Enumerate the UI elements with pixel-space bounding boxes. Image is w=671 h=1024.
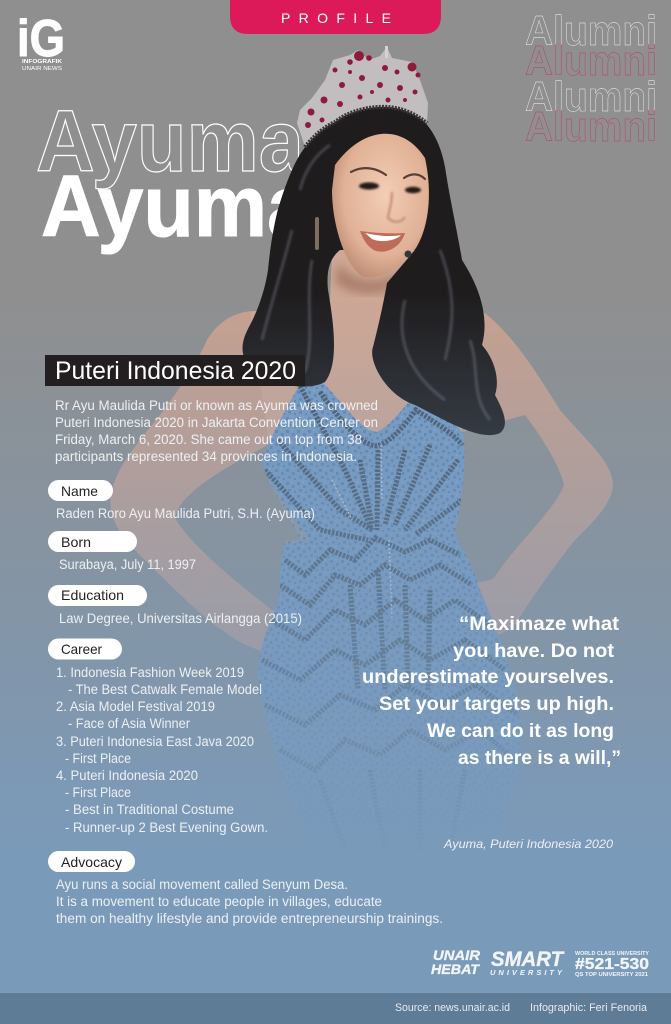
earrings: [315, 217, 412, 258]
QS world class ranking: #521-530: [575, 956, 649, 973]
right arm: [433, 308, 613, 642]
stacked Alumni wordmark: Alumni: [525, 75, 657, 120]
smiling mouth: [360, 231, 405, 252]
gown speckle: [259, 385, 520, 720]
pull quote: We can do it as long: [427, 720, 614, 742]
label: Education: [48, 585, 147, 606]
pull quote: as there is a will,”: [458, 747, 621, 769]
panel: profile details: [45, 355, 443, 926]
footer band: [0, 993, 671, 1024]
career list: - Best in Traditional Costume: [65, 802, 234, 817]
value: education: Law Degree, Universitas Airlangga (2015): [59, 611, 302, 626]
photo: woman wearing crown and blue gown: [110, 46, 613, 870]
stacked Alumni wordmark: Alumni: [525, 39, 657, 84]
pull quote: underestimate yourselves.: [362, 666, 614, 688]
crown gems: [305, 51, 420, 128]
logo: Unair Hebat: [431, 947, 481, 977]
label: Career: [48, 638, 122, 660]
career list: [56, 665, 268, 835]
logo: iG Infografik Unair News: iG: [17, 10, 65, 68]
label: Name: Name: [61, 483, 98, 499]
hair highlights: [262, 145, 490, 420]
nose: [388, 192, 405, 222]
eyebrows: [351, 168, 425, 179]
pull quote: Set your targets up high.: [379, 693, 614, 715]
advocacy paragraph: them on healthy lifestyle and provide entrepreneurship trainings.: [56, 911, 443, 926]
intro paragraph: participants represented 34 provinces in Indonesia.: [55, 449, 357, 464]
label: Advocacy: Advocacy: [61, 854, 122, 870]
tab: profile: [230, 0, 441, 34]
advocacy paragraph: [56, 877, 443, 926]
label: Born: Born: [61, 534, 91, 550]
left arm: [110, 311, 338, 660]
face: [332, 134, 429, 277]
label: Born: [48, 531, 137, 552]
career list: 3. Puteri Indonesia East Java 2020: [56, 734, 254, 749]
stacked Alumni wordmark: [525, 9, 657, 150]
pull quote: you have. Do not: [453, 640, 615, 662]
gown mesh panel: [270, 482, 310, 545]
label: Career: Career: [61, 641, 102, 657]
logo: iG Infografik Unair News: UNAIR NEWS: [22, 66, 62, 72]
career list: - The Best Catwalk Female Model: [68, 682, 262, 697]
logo: Smart University: SMART: [491, 948, 565, 971]
tab: profile: PROFILE: [281, 10, 391, 26]
logo: iG Infografik Unair News: INFOGRAFIK: [22, 59, 62, 65]
career list: - Face of Asia Winner: [68, 716, 190, 731]
subtitle: Puteri Indonesia 2020: Puteri Indonesia 2020: [55, 357, 296, 385]
neck shadow: [335, 262, 410, 294]
logo: Smart University: UNIVERSITY: [490, 968, 563, 977]
QS world class ranking: WORLD CLASS UNIVERSITY: [575, 951, 649, 957]
quote attribution: Ayuma, Puteri Indonesia 2020: [443, 837, 613, 851]
career list: 2. Asia Model Festival 2019: [56, 699, 215, 714]
logo: Unair Hebat: HEBAT: [431, 961, 480, 977]
label: Name: [48, 480, 113, 501]
torso and neck: [250, 250, 490, 450]
career list: 4. Puteri Indonesia 2020: [56, 768, 198, 783]
intro paragraph: [55, 398, 378, 464]
intro paragraph: Puteri Indonesia 2020 in Jakarta Convention Center on: [55, 415, 378, 430]
intro paragraph: Rr Ayu Maulida Putri or known as Ayuma was crowned: [55, 398, 378, 413]
heading: solid Ayuma: Ayuma: [41, 157, 314, 255]
gown beading: [262, 386, 518, 850]
label: Advocacy: [48, 851, 135, 872]
gown: [258, 383, 521, 789]
logo: Unair Hebat: UNAIR: [433, 947, 481, 963]
crown: [297, 46, 428, 147]
value: name: Raden Roro Ayu Maulida Putri, S.H. (Ayuma): [56, 506, 315, 521]
eyes: [359, 182, 421, 193]
footer band: Infographic: Feri Fenoria: [530, 1002, 648, 1014]
advocacy paragraph: Ayu runs a social movement called Senyum Desa.: [56, 877, 348, 892]
heading: outlined Ayuma: Ayuma: [36, 92, 305, 190]
footer band: Source: news.unair.ac.id: [395, 1002, 510, 1014]
stacked Alumni wordmark: Alumni: [525, 9, 657, 54]
pull quote: “Maximaze what: [459, 613, 620, 635]
QS world class ranking: [575, 951, 649, 978]
value: born: Surabaya, July 11, 1997: [59, 557, 196, 572]
advocacy paragraph: It is a movement to educate people in villages, educate: [56, 894, 382, 909]
pull quote: [362, 613, 621, 769]
QS world class ranking: QS TOP UNIVERSITY 2021: [575, 972, 648, 978]
logos: Unair Hebat, Smart University, QS ranking: [431, 947, 649, 978]
career list: - First Place: [65, 751, 131, 766]
career list: 1. Indonesia Fashion Week 2019: [56, 665, 244, 680]
hair: [243, 106, 505, 435]
intro paragraph: Friday, March 6, 2020. She came out on top from 38: [55, 432, 362, 447]
blue gradient fade: [0, 290, 671, 1024]
label: Education: Education: [61, 587, 124, 603]
stacked Alumni wordmark: Alumni: [525, 105, 657, 150]
career list: - Runner-up 2 Best Evening Gown.: [65, 820, 268, 835]
career list: - First Place: [65, 785, 131, 800]
